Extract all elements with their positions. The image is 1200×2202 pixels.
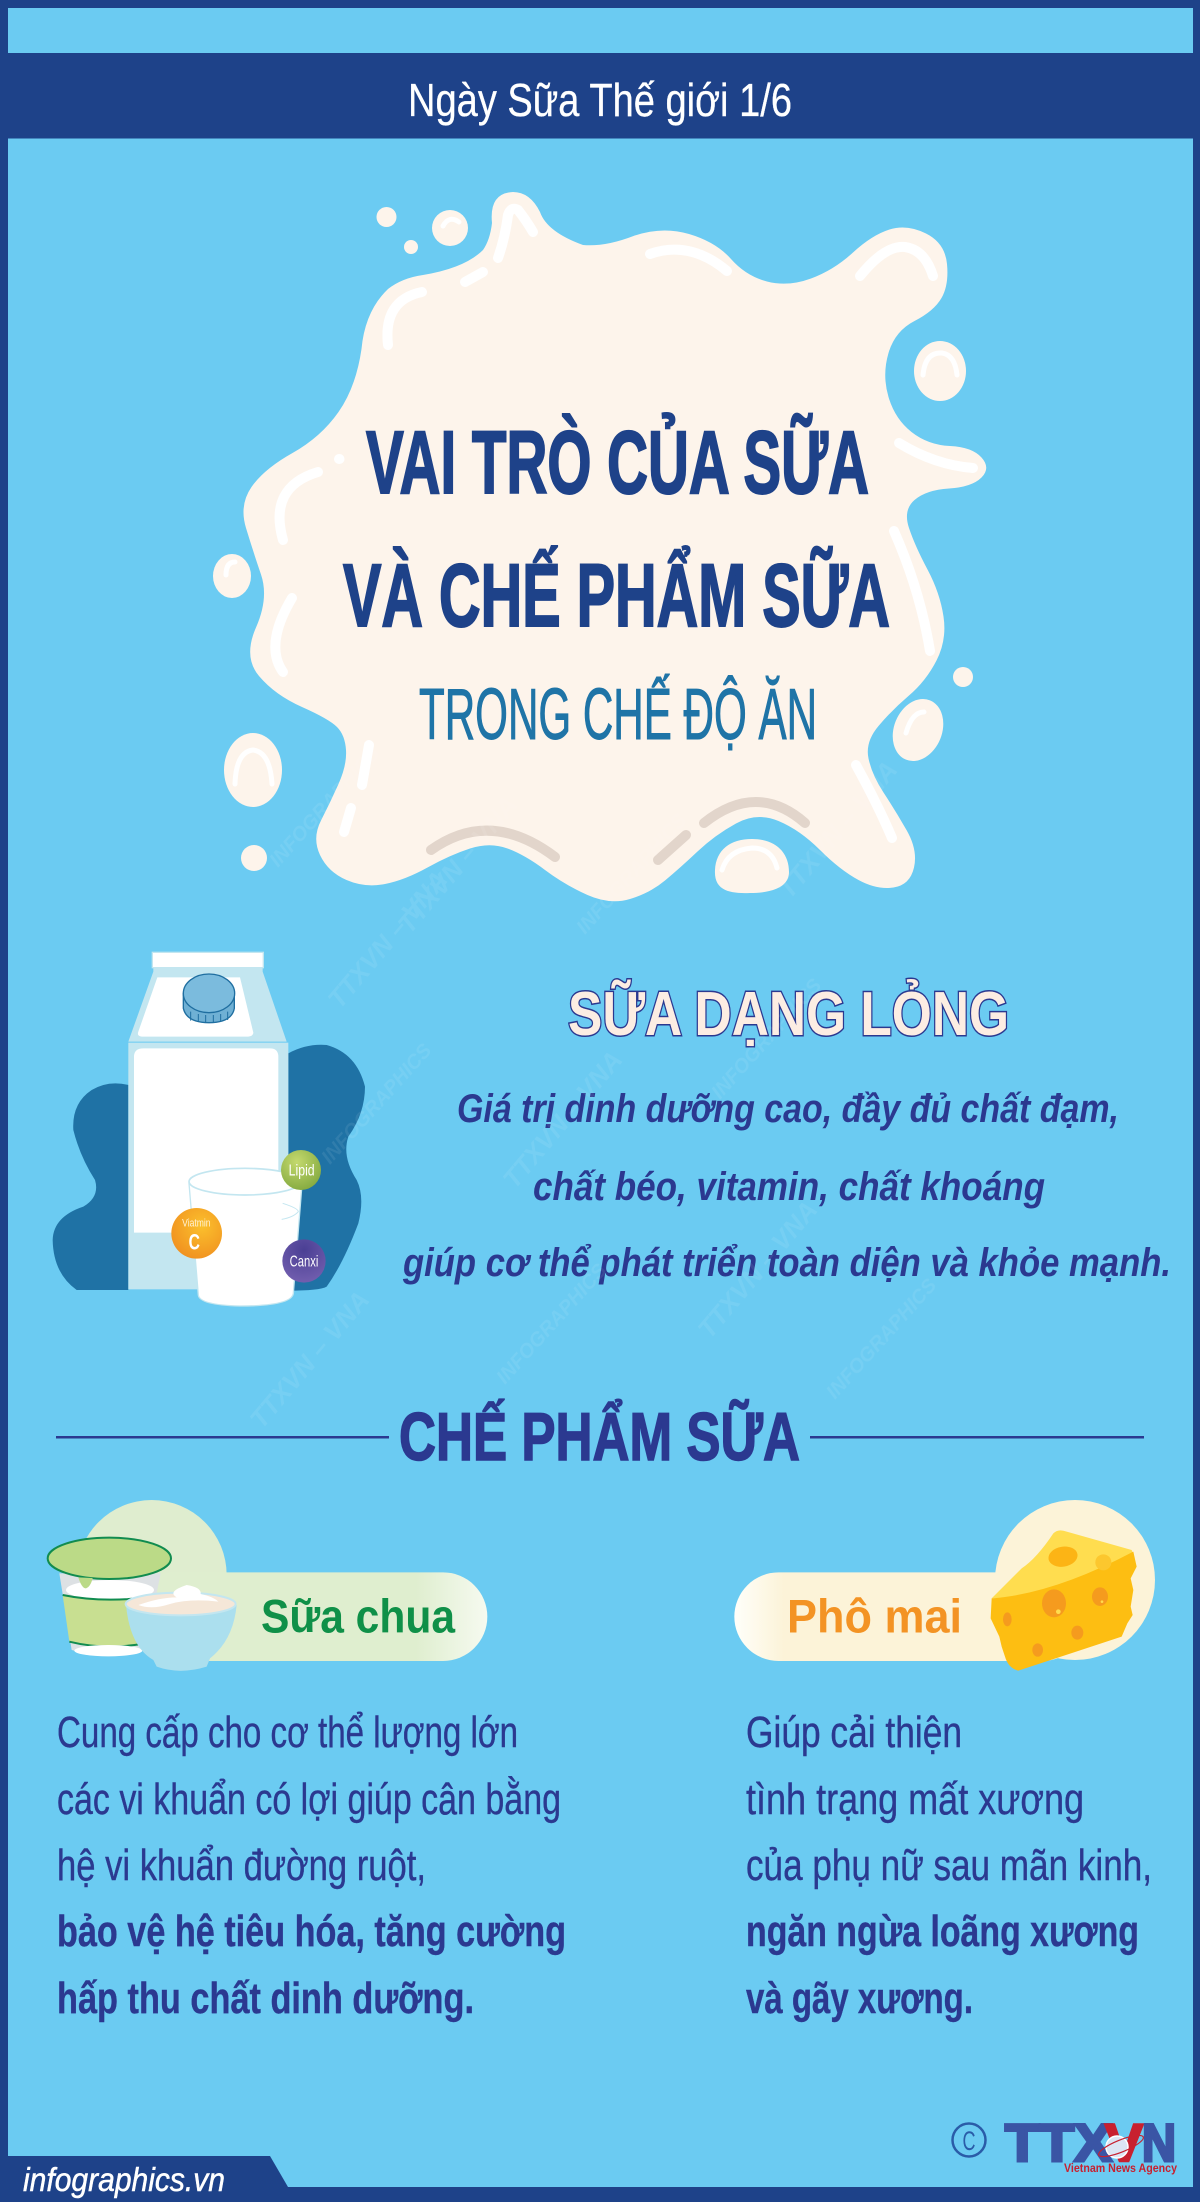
yogurt description: các vi khuẩn có lợi giúp cân bằng [57, 1775, 561, 1824]
footer tab [0, 2156, 1200, 2202]
yogurt description: hệ vi khuẩn đường ruột, [57, 1841, 426, 1890]
carton cap [183, 974, 235, 1023]
glass of milk [189, 1168, 302, 1306]
top banner [0, 53, 1200, 138]
nutrient ball: Lipid [281, 1150, 321, 1190]
droplet highlights [226, 219, 957, 870]
cheese label: Phô mai [787, 1590, 962, 1642]
milk highlights [275, 209, 973, 838]
copyright logo TTXVN: TTX [1005, 2114, 1112, 2173]
watermark: INFOGRAPHICS [492, 1259, 612, 1388]
nutrient ball: Vitamin C: C [189, 1229, 200, 1254]
nutrient ball: Lipid: Lipid [289, 1163, 315, 1180]
yogurt description: hấp thu chất dinh dưỡng. [57, 1974, 474, 2023]
icon: yogurt cup [48, 1538, 171, 1656]
dairy products heading: CHẾ PHẨM SỮA [399, 1398, 800, 1475]
yogurt badge [48, 1500, 487, 1671]
milk droplets [213, 207, 973, 893]
watermark: INFOGRAPHICS [265, 742, 385, 871]
watermark: TTXVN – VNA [692, 1195, 823, 1344]
cheese badge background [734, 1500, 1155, 1671]
milk splash blob [243, 192, 986, 901]
watermark: INFOGRAPHICS [317, 1039, 437, 1168]
milk shadows [431, 802, 805, 860]
watermark: TTXVN – VNA [392, 790, 523, 939]
cheese description: Giúp cải thiện [746, 1708, 962, 1757]
copyright logo TTXVN [952, 2114, 1177, 2175]
icon: yogurt bowl [126, 1585, 237, 1671]
footer tab: infographics.vn [23, 2161, 225, 2198]
watermark: INFOGRAPHICS [822, 1274, 942, 1403]
cheese description: tình trạng mất xương [746, 1775, 1084, 1824]
yogurt description: Cung cấp cho cơ thể lượng lớn [57, 1708, 518, 1757]
copyright logo TTXVN: V [1105, 2114, 1143, 2173]
liquid milk description: chất béo, vitamin, chất khoáng [533, 1165, 1045, 1209]
cheese badge [734, 1500, 1155, 1671]
liquid milk description [402, 1087, 1171, 1285]
main title line 1: VAI TRÒ CỦA SỮA [366, 412, 869, 512]
watermark: INFOGRAPHICS [572, 809, 692, 938]
yogurt badge background [48, 1500, 487, 1671]
watermark: INFOGRAPHICS [707, 974, 827, 1103]
nutrient ball: Canxi: Canxi [290, 1253, 318, 1270]
copyright logo TTXVN: N [1142, 2114, 1176, 2173]
cheese description: và gãy xương. [746, 1974, 973, 2023]
main title line 3: TRONG CHẾ ĐỘ ĂN [419, 674, 817, 755]
cheese description [746, 1708, 1152, 2023]
carton [128, 952, 288, 1289]
icon: cheese wedge [991, 1530, 1137, 1671]
watermark: TTXVN – VNA [497, 1045, 628, 1194]
nutrient ball: Vitamin C: Viatmin [182, 1218, 210, 1230]
nutrient ball: Canxi [282, 1239, 326, 1283]
top banner: Ngày Sữa Thế giới 1/6 [408, 74, 792, 126]
yogurt description [57, 1708, 566, 2023]
copyright logo TTXVN: C [962, 2126, 976, 2156]
liquid milk heading: SỮA DẠNG LỎNG [568, 980, 1009, 1049]
dark blue backdrop blobs [53, 1045, 365, 1291]
watermark: TTXVN – VNA [322, 865, 453, 1014]
watermark: TTXVN – VNA [244, 1285, 375, 1434]
watermark: TTXVN – VNA [772, 755, 903, 904]
illustration: milk carton and glass [53, 952, 365, 1306]
copyright logo TTXVN: Vietnam News Agency [1064, 2161, 1177, 2175]
milk splash title panel [213, 192, 986, 901]
nutrient ball: Vitamin C [171, 1208, 222, 1259]
yogurt label: Sữa chua [261, 1590, 456, 1642]
yogurt description: bảo vệ hệ tiêu hóa, tăng cường [57, 1907, 566, 1956]
watermark [244, 742, 942, 1434]
main title line 2: VÀ CHẾ PHẨM SỮA [343, 545, 890, 645]
